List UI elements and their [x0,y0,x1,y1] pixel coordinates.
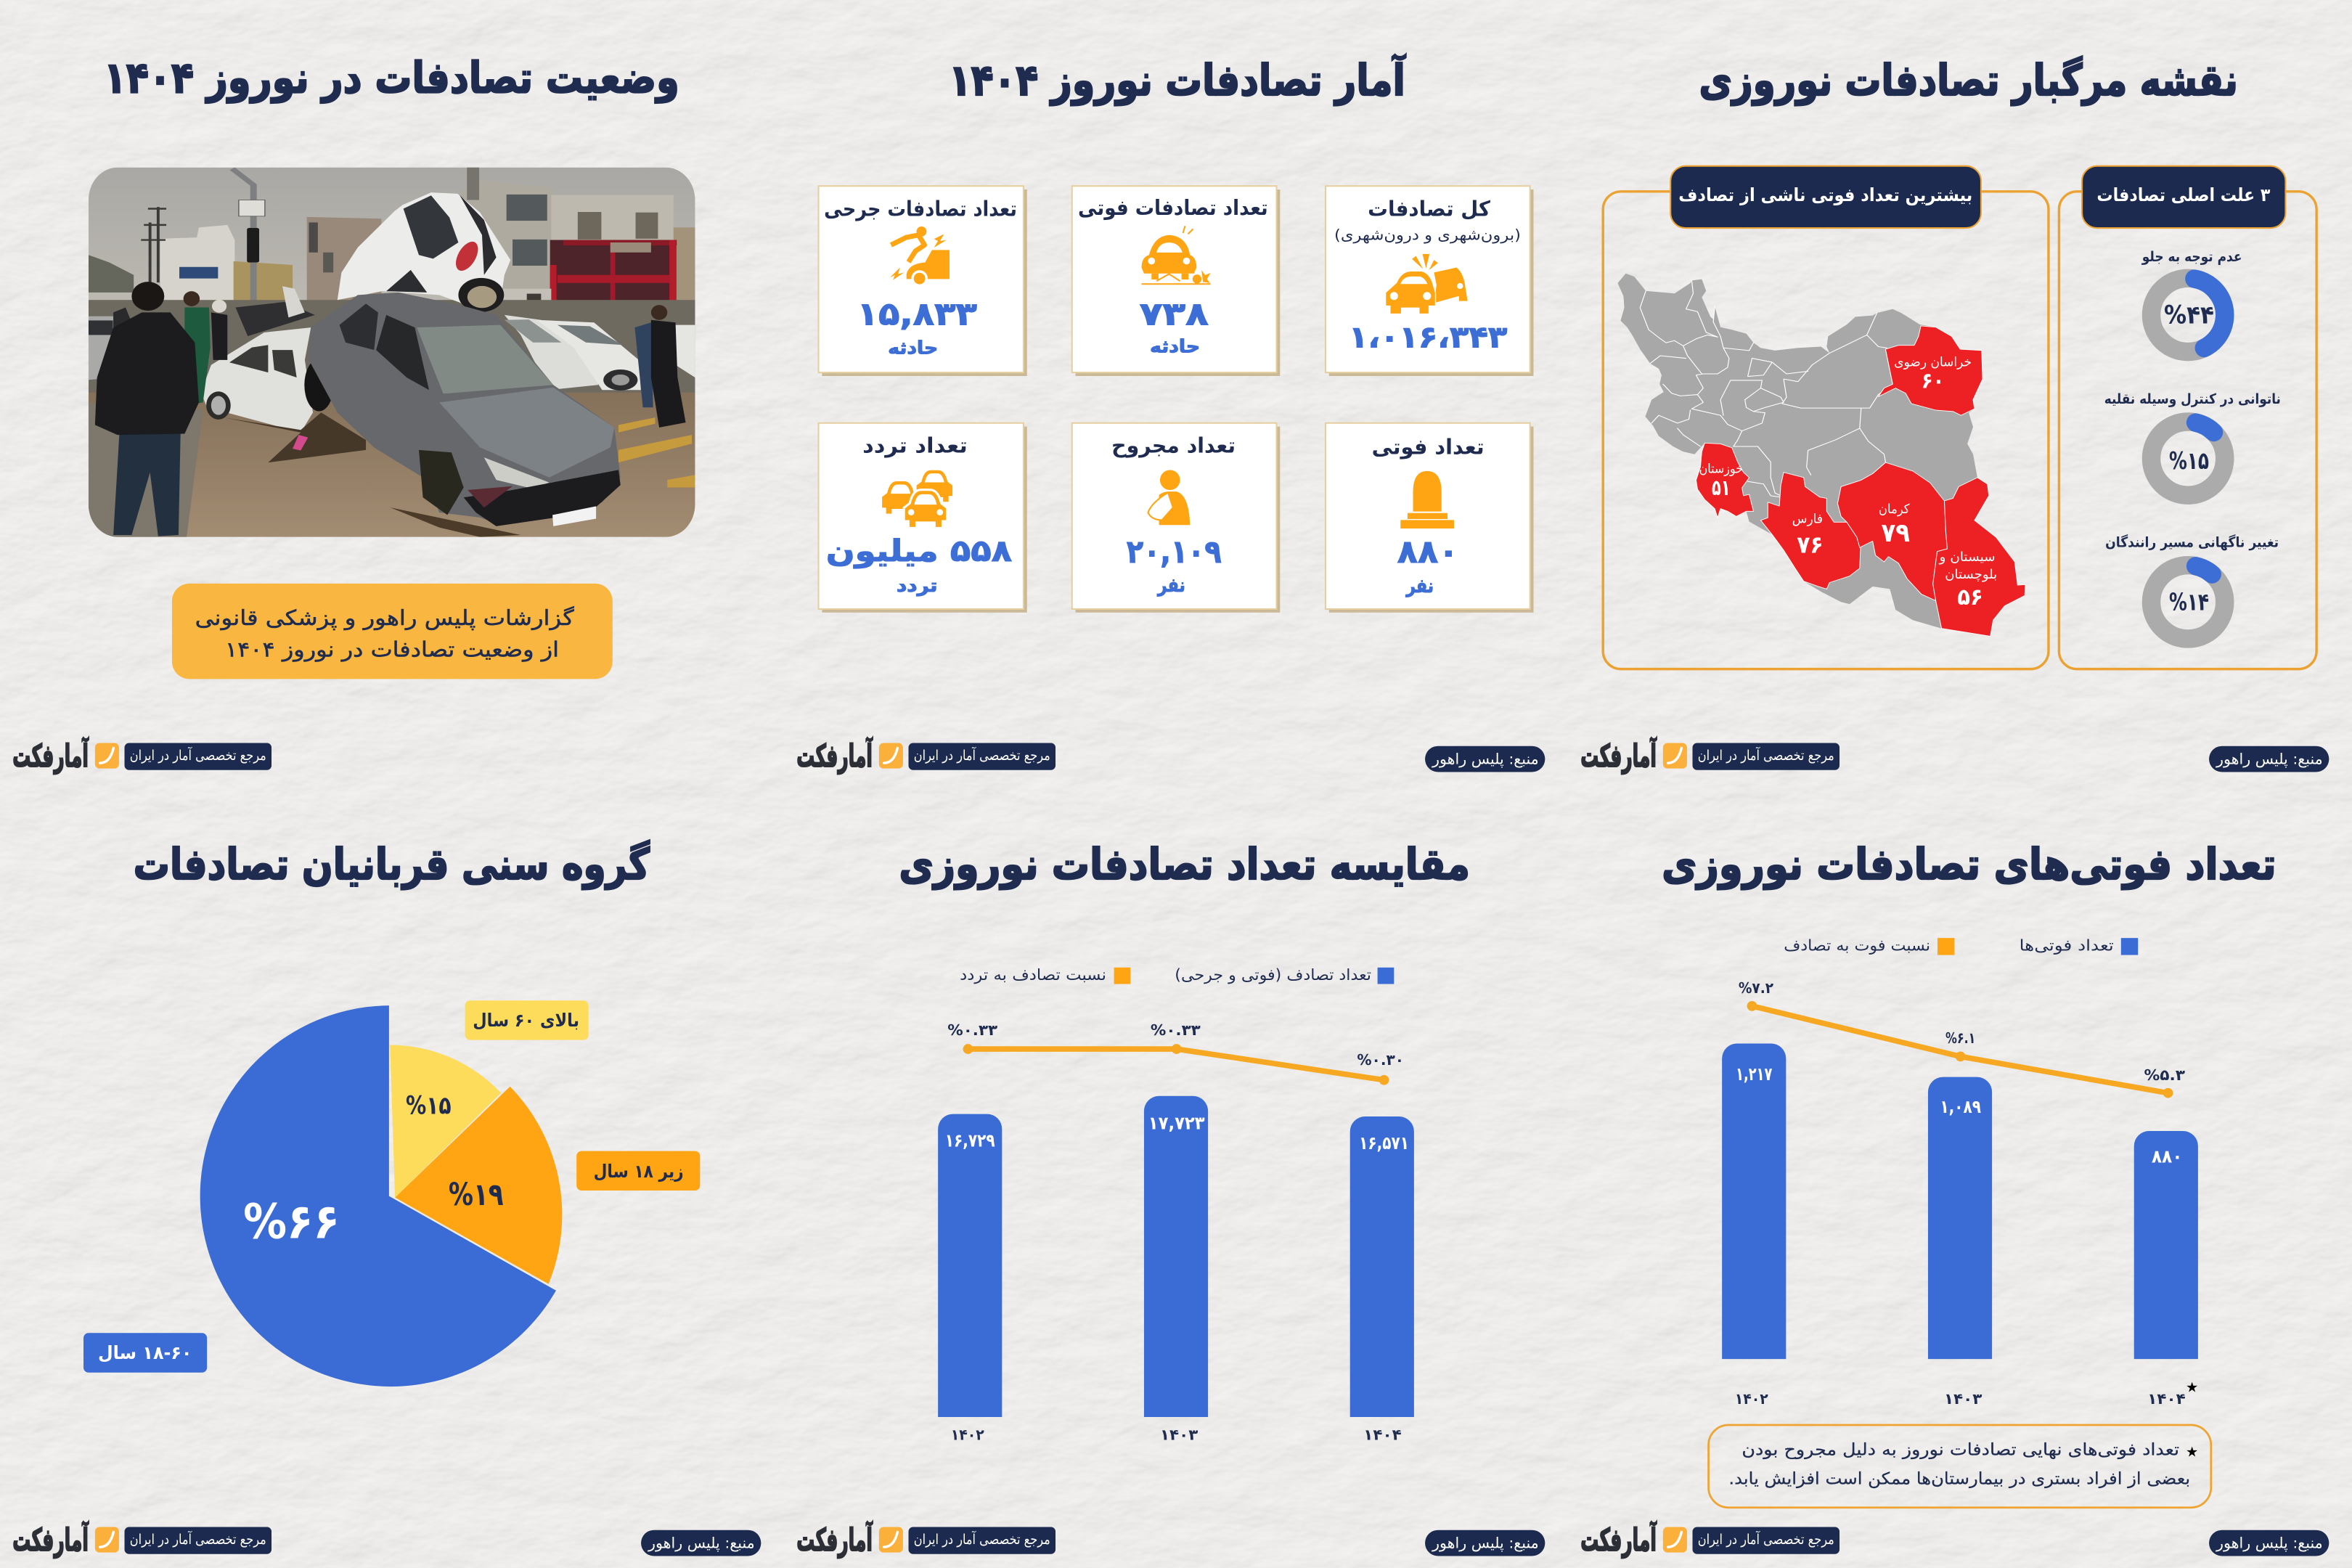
line chart: ratio to traffic: %۰.۳۳ [1151,1021,1201,1039]
footnote box: ★ [2186,1443,2198,1460]
source tag [2209,1530,2329,1556]
card: deaths count [1326,423,1534,613]
footer branding [1580,737,1839,775]
pie chart: %۱۹ [449,1177,504,1213]
bar chart: ۱۴۰۲ [1735,1390,1768,1408]
map labels: خوزستان [1699,462,1743,476]
donut: not looking ahead 44 percent: عدم توجه به جلو [2141,248,2242,265]
icon: three cars [881,470,953,528]
card: deaths count: نفر [1405,576,1434,597]
card: injury accidents [819,186,1027,376]
line chart: ratio to traffic [947,1021,1404,1085]
card: injured count: ۲۰,۱۰۹ [1127,534,1222,571]
footnote box: بعضی از افراد بستری در بیمارستان‌ها ممکن است افزایش یابد. [1728,1469,2190,1488]
callout: reports [172,584,613,679]
bar chart: ۱,۰۸۹ [1940,1096,1981,1117]
footnote box: تعداد فوتی‌های نهایی تصادفات نوروز به دلیل مجروح بودن [1741,1440,2179,1459]
callout: reports: از وضعیت تصادفات در نوروز ۱۴۰۴ [225,637,559,661]
source tag [641,1530,761,1556]
legend tag: under 18: زیر ۱۸ سال [594,1161,684,1183]
card: injury accidents: حادثه [888,338,938,359]
map labels: فارس [1792,512,1823,526]
legend: نسبت فوت به تصادف [1784,936,1930,955]
map labels: بلوچستان [1945,568,1997,582]
line chart: death ratio: %۵.۳ [2144,1066,2185,1084]
legend [960,966,1394,984]
panel: accident count comparison [796,839,1545,1559]
card: injured count: نفر [1156,575,1185,597]
legend tag: over 60 [465,1000,589,1040]
far cars [89,317,113,380]
line chart: death ratio: %۷.۲ [1739,979,1773,997]
panel: accident situation with photo [12,52,695,775]
bar chart: ۱۴۰۳ [1160,1426,1199,1444]
donut: not looking ahead 44 percent: %۴۴ [2164,301,2214,330]
footer branding [12,737,271,775]
section box: causes: ۳ علت اصلی تصادفات [2096,184,2270,205]
bar chart: ۱۴۰۴ [1363,1426,1402,1444]
panel: accident statistics cards [796,54,1545,775]
legend tag: 18 to 60 [83,1333,207,1373]
card: injured count: تعداد مجروح [1111,433,1236,457]
card: total accidents: کل تصادفات [1368,197,1490,221]
card: total accidents: (برون‌شهری و درون‌شهری) [1334,226,1521,244]
bar chart: ۱۶,۵۷۱ [1359,1132,1409,1153]
footer branding: آمارفکت [12,737,89,775]
icon: tombstone [1400,471,1454,528]
card: traffic count [819,423,1027,613]
bar chart: ۸۸۰ [2152,1146,2183,1167]
card: fatal accidents: تعداد تصادفات فوتی [1078,195,1268,220]
footer branding: آمارفکت [12,1521,89,1559]
line chart: ratio to traffic: %۰.۳۰ [1357,1051,1404,1069]
section box: causes [2059,166,2316,669]
legend tag: over 60: بالای ۶۰ سال [473,1010,579,1031]
card: total accidents: ۱،۰۱۶،۳۴۳ [1349,320,1507,355]
legend tag: 18 to 60: ۱۸-۶۰ سال [98,1342,192,1363]
footer branding: آمارفکت [796,1521,873,1559]
footer branding: مرجع تخصصی آمار در ایران [914,1530,1050,1548]
map labels: ۵۱ [1712,476,1731,501]
footer branding [796,1521,1055,1559]
card: total accidents [1326,186,1534,376]
donut: not looking ahead 44 percent [2141,248,2242,358]
card: fatal accidents: حادثه [1150,336,1200,357]
map labels: کرمان [1879,502,1910,517]
footer branding: آمارفکت [1580,737,1657,775]
people [184,308,211,405]
donut: inability to control vehicle 15 percent: %۱۵ [2169,446,2209,475]
donut: sudden lane change 14 percent: تغییر ناگهانی مسیر رانندگان [2105,534,2279,551]
photo: wrecked cars after flood [89,168,695,537]
source tag: منبع: پلیس راهور [2216,1534,2323,1551]
card: traffic count: ۵۵۸ میلیون [826,534,1012,569]
pie chart: %۶۶ [243,1193,340,1249]
title: گروه سنی قربانیان تصادفات [134,839,650,890]
donut: inability to control vehicle 15 percent [2104,391,2281,502]
donut: inability to control vehicle 15 percent: ناتوانی در کنترل وسیله نقلیه [2104,391,2281,407]
bar chart: ★ [2186,1379,2198,1396]
title: نقشه مرگبار تصادفات نوروزی [1699,55,2238,106]
bar chart: ۱,۲۱۷ [1736,1063,1772,1085]
section box: deaths by province: بیشترین تعداد فوتی ناشی از تصادف [1678,184,1972,206]
legend: نسبت تصادف به تردد [960,966,1106,984]
card: fatal accidents: ۷۳۸ [1140,296,1209,333]
region: Fars [1760,473,1861,589]
source tag [1425,746,1545,772]
legend: تعداد فوتی‌ها [2020,936,2114,955]
footer branding: مرجع تخصصی آمار در ایران [130,1530,266,1548]
title: وضعیت تصادفات در نوروز ۱۴۰۴ [104,52,679,103]
source tag: منبع: پلیس راهور [648,1534,755,1551]
map labels: ۵۶ [1957,583,1983,610]
bar chart: ۱۶,۷۲۹ [945,1130,995,1151]
region: Sistan and Baluchestan [1933,478,2025,636]
title: تعداد فوتی‌های تصادفات نوروزی [1662,839,2277,890]
map of Iran [1617,274,2025,636]
bar chart [938,1096,1414,1444]
map labels: ۶۰ [1922,369,1944,393]
footer branding: مرجع تخصصی آمار در ایران [1698,746,1834,764]
panel: deadly accidents map [1580,55,2329,775]
grey hatchback [304,363,331,411]
map labels [1699,355,1997,610]
card: injured count [1072,423,1280,613]
white car standing on its nose [338,192,510,312]
footer branding: مرجع تخصصی آمار در ایران [130,746,266,764]
title: مقایسه تعداد تصادفات نوروزی [899,839,1470,890]
footer branding: آمارفکت [796,737,873,775]
panel: age groups pie chart [12,839,761,1559]
source tag: منبع: پلیس راهور [1432,750,1539,767]
bar chart: ۱۴۰۲ [951,1426,984,1444]
region: Kerman [1837,462,1947,600]
source tag: منبع: پلیس راهور [1432,1534,1539,1551]
callout: reports: گزارشات پلیس راهور و پزشکی قانونی [195,605,574,631]
icon: car over victim [1141,226,1211,284]
section box: deaths by province [1603,166,2049,669]
source tag [1425,1530,1545,1556]
panel: deaths count comparison [1580,839,2329,1559]
card: deaths count: تعداد فوتی [1372,434,1485,459]
title: آمار تصادفات نوروز ۱۴۰۴ [949,54,1406,106]
legend [1784,936,2138,955]
donut: sudden lane change 14 percent: %۱۴ [2169,587,2209,616]
line chart: death ratio [1739,979,2185,1098]
source tag [2209,746,2329,772]
bar chart: ۱۴۰۴ [2147,1390,2186,1408]
pie chart [200,1005,562,1387]
card: traffic count: تعداد تردد [862,433,968,457]
region: Khuzestan [1696,443,1754,518]
line chart: ratio to traffic: %۰.۳۳ [947,1021,998,1039]
card: fatal accidents [1072,186,1280,376]
footer branding [12,1521,271,1559]
legend tag: under 18 [576,1151,700,1191]
map labels: ۷۹ [1881,518,1910,548]
footnote box [1709,1425,2211,1508]
map labels: ۷۶ [1797,531,1824,559]
icon: person hit by car [890,226,950,285]
card: injury accidents: تعداد تصادفات جرحی [824,197,1017,221]
bar chart [1722,1043,2198,1408]
footer branding: مرجع تخصصی آمار در ایران [1698,1530,1834,1548]
icon: person with arm sling [1148,470,1190,525]
footer branding [796,737,1055,775]
footer branding: مرجع تخصصی آمار در ایران [914,746,1050,764]
footer branding [1580,1521,1839,1559]
legend: تعداد تصادف (فوتی و جرحی) [1175,966,1371,984]
line chart: death ratio: %۶.۱ [1945,1029,1975,1047]
card: injury accidents: ۱۵,۸۳۳ [857,296,977,333]
bar chart: ۱۷,۷۲۳ [1148,1112,1205,1133]
region: Khorasan Razavi [1879,326,1983,415]
card: traffic count: تردد [897,575,937,597]
map labels: سیستان و [1939,550,1996,565]
source tag: منبع: پلیس راهور [2216,750,2323,767]
donut: sudden lane change 14 percent [2105,534,2279,645]
footer branding: آمارفکت [1580,1521,1657,1559]
icon: two crashing cars [1386,254,1468,314]
bar chart: ۱۴۰۳ [1944,1390,1983,1408]
white wrecked sedan [201,327,313,433]
map labels: خراسان رضوی [1894,355,1972,369]
pie chart: %۱۵ [406,1092,452,1121]
card: deaths count: ۸۸۰ [1397,534,1459,571]
utility poles [141,207,166,282]
